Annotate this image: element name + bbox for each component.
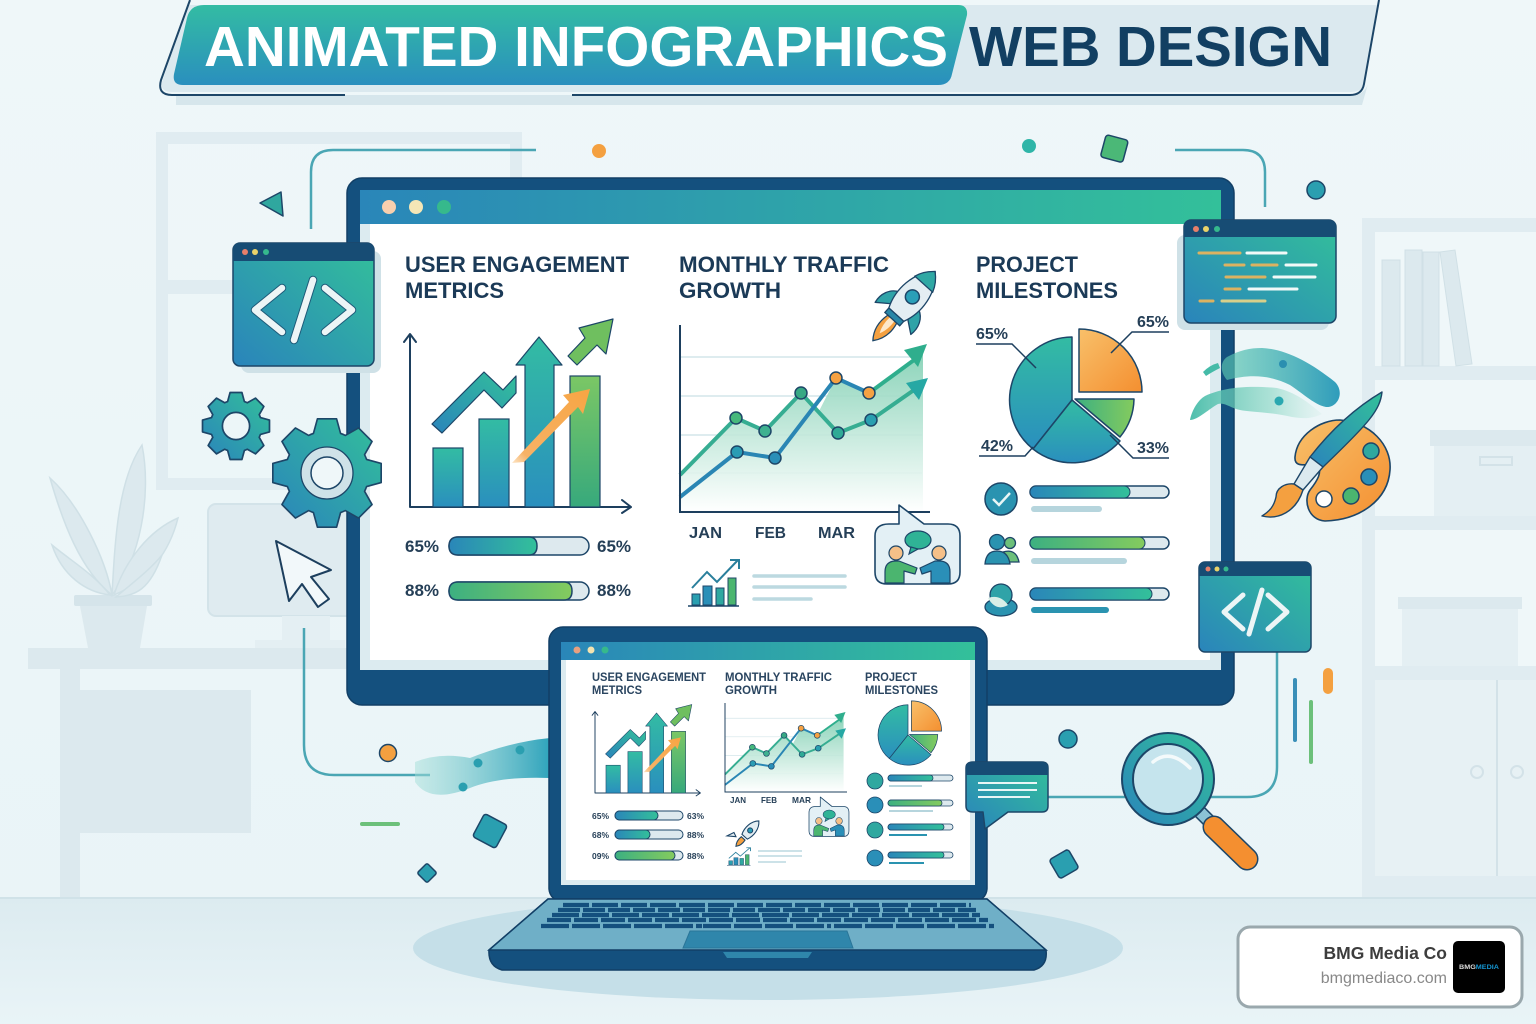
window dots: [382, 200, 451, 214]
milestone row 3: [985, 584, 1169, 616]
heading: METRICS: [405, 278, 504, 303]
progress: 88%: 88%: [405, 581, 439, 600]
laptop heading: project milestones: PROJECT: [865, 672, 917, 684]
laptop bar chart: [592, 704, 700, 796]
laptop month labels: MAR: [792, 795, 811, 805]
progress: 88%: [405, 581, 631, 600]
trackpad: [683, 931, 853, 948]
laptop month labels: JAN: [730, 795, 746, 805]
panel: monthly traffic growth: [679, 252, 960, 606]
window dots: [574, 646, 608, 654]
laptop browser bar: [561, 642, 975, 660]
icon: large gear: [273, 419, 381, 527]
laptop heading: monthly traffic: MONTHLY TRAFFIC: [725, 672, 832, 684]
laptop progress rows: [592, 811, 704, 861]
laptop text lines: [758, 851, 802, 862]
laptop milestone rows: [867, 773, 953, 866]
pie labels: 42%: [981, 438, 1013, 455]
heading: [976, 252, 1118, 303]
floor and laptop shadow: [0, 896, 1536, 1024]
month labels: FEB: [755, 525, 786, 542]
title text: animated infographics: ANIMATED INFOGRAPHICS: [204, 15, 948, 79]
laptop screen: [561, 642, 975, 885]
line chart: [680, 325, 930, 512]
laptop callout: [809, 797, 849, 836]
heading: [405, 252, 630, 303]
code window: top right with code lines: [1177, 220, 1336, 330]
laptop month labels: FEB: [761, 795, 777, 805]
pie labels: 65%: [976, 326, 1008, 343]
laptop heading: user engagement: [592, 672, 706, 697]
laptop line chart: [725, 703, 847, 792]
progress: 65%: 65%: [405, 537, 439, 556]
large monitor: [347, 178, 1234, 705]
laptop heading: project milestones: [865, 672, 938, 697]
pie labels: 33%: [1137, 440, 1169, 457]
laptop progress rows: 09%: [592, 851, 609, 861]
code window: left: [233, 243, 381, 373]
badge: BMG Media Co: [1238, 927, 1522, 1007]
keyboard: [541, 905, 994, 926]
laptop side paint swoosh: [415, 738, 550, 795]
brand name: BMG Media Co: [1324, 943, 1447, 963]
laptop progress rows: 68%: [592, 830, 609, 840]
right background room: shelves, books, boxes, cabinet: [1362, 218, 1536, 898]
laptop pie chart: [878, 701, 942, 765]
laptop progress rows: 88%: [687, 830, 704, 840]
brand url: bmgmediaco.com: [1321, 970, 1447, 987]
brush: [1262, 392, 1382, 517]
laptop progress rows: 63%: [687, 811, 704, 821]
panel: user engagement metrics: [404, 252, 631, 600]
icon: rocket: [855, 255, 953, 357]
title text: web design: WEB DESIGN: [969, 15, 1332, 79]
icon: small gear: [203, 393, 269, 459]
laptop heading: monthly traffic: [725, 672, 832, 697]
laptop progress rows: 88%: [687, 851, 704, 861]
heading: MONTHLY TRAFFIC: [679, 252, 889, 277]
title banner: [160, 0, 1379, 105]
paint swooshes: [1190, 348, 1340, 420]
heading: MILESTONES: [976, 278, 1118, 303]
icon: palette and brush: [1262, 392, 1390, 521]
laptop rocket: [727, 812, 763, 849]
pie labels: 65%: [1137, 314, 1169, 331]
heading: [679, 252, 889, 303]
heading: PROJECT: [976, 252, 1079, 277]
laptop base: [489, 899, 1046, 970]
month labels: JAN: [689, 525, 722, 542]
icon: code brackets: [1224, 590, 1287, 634]
heading: GROWTH: [679, 278, 781, 303]
laptop heading: project milestones: MILESTONES: [865, 685, 938, 697]
icon: small growth chart: [688, 560, 739, 606]
icon: mouse cursor: [276, 541, 331, 607]
month labels: MAR: [818, 525, 855, 542]
code lines: [1199, 253, 1316, 301]
laptop heading: user engagement: METRICS: [592, 685, 642, 697]
logo: BMG MEDIA: [1459, 964, 1499, 971]
panel: project milestones: [976, 252, 1169, 616]
milestone row 2: [985, 534, 1169, 564]
logo: [1453, 941, 1505, 993]
laptop month labels: [730, 795, 811, 805]
progress: 88%: 88%: [597, 581, 631, 600]
pie chart: [1010, 329, 1142, 463]
pie labels: [976, 314, 1169, 458]
callout: meeting illustration: [875, 505, 960, 584]
code window: middle right: [1199, 562, 1311, 652]
left background room: window, desk, plant: [28, 132, 522, 898]
laptop lid: [549, 627, 987, 902]
month labels: [689, 525, 855, 542]
milestone row 1: [985, 483, 1169, 515]
laptop deck: [489, 899, 1046, 950]
icon: code brackets: [255, 280, 352, 340]
connector lines and floating shapes: [260, 135, 1333, 883]
laptop: [489, 627, 1046, 970]
laptop mini chart: [727, 848, 750, 865]
bar chart: [404, 319, 631, 513]
laptop heading: monthly traffic: GROWTH: [725, 685, 777, 697]
heading: USER ENGAGEMENT: [405, 252, 630, 277]
monitor browser bar: [360, 190, 1221, 224]
text placeholder lines: [754, 576, 845, 599]
laptop progress rows: 65%: [592, 811, 609, 821]
laptop heading: user engagement: USER ENGAGEMENT: [592, 672, 706, 684]
icon: magnifying glass: [1122, 733, 1247, 859]
progress: 65%: 65%: [597, 537, 631, 556]
callout: chat bubble: [966, 762, 1048, 829]
progress: 65%: [405, 537, 631, 556]
